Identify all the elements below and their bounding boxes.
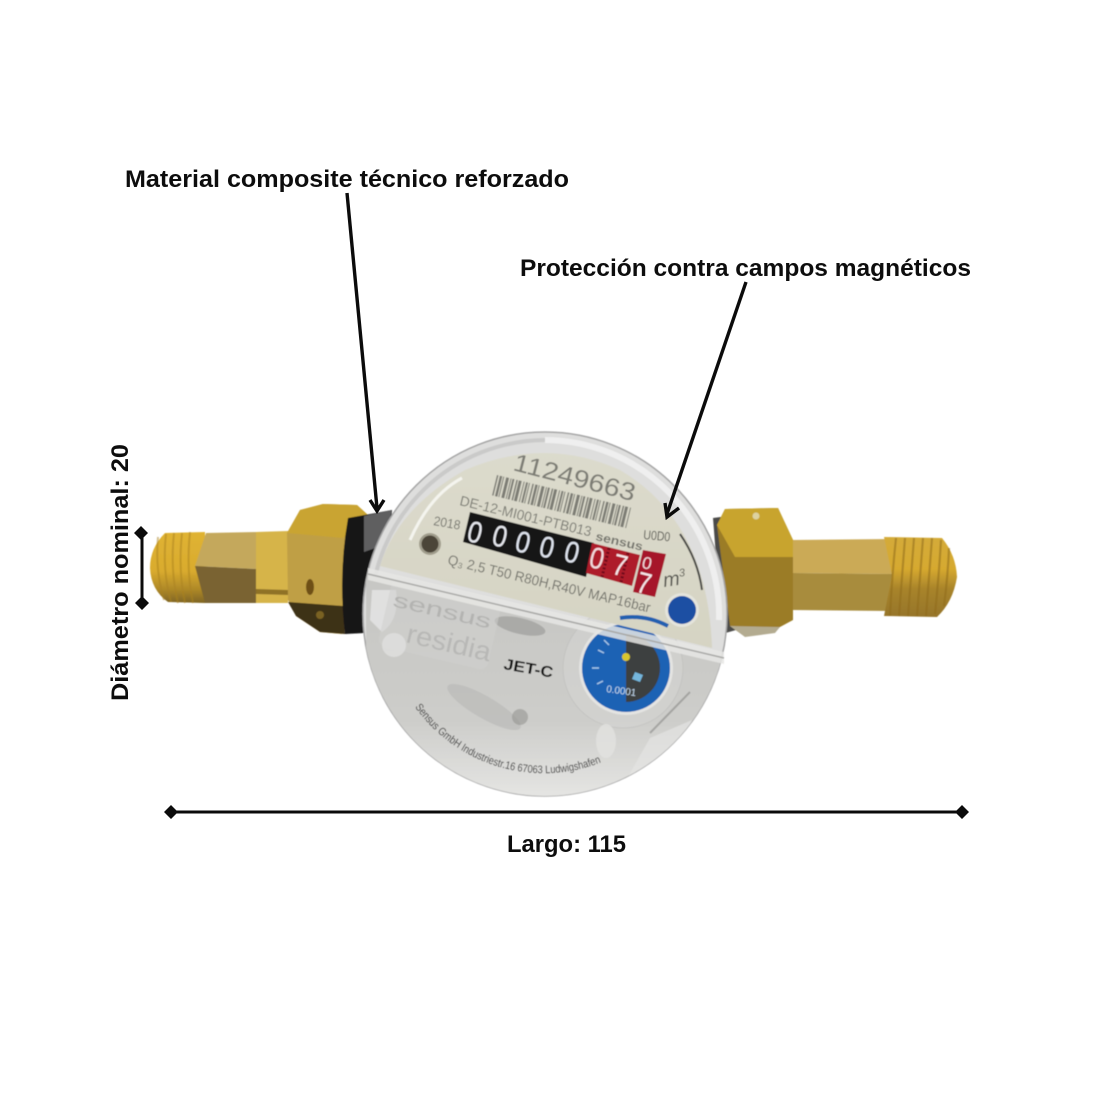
sensus residia logo plate — [377, 575, 503, 671]
odometer digits: 0 — [640, 553, 654, 574]
infographic: water meter diagram — [110, 170, 970, 857]
manufacturer address on rim: Sensus GmbH Industriestr.16 67063 Ludwigshafen — [415, 703, 601, 774]
unit: 3 — [678, 567, 687, 580]
odometer digits: 0 — [489, 518, 511, 554]
sensus residia logo plate: residia — [404, 619, 495, 667]
black meter collar — [342, 510, 392, 634]
sensus small logo: sensus — [594, 529, 645, 554]
code U0D0: U0D0 — [643, 527, 671, 544]
photo: water meter — [149, 430, 958, 798]
unit: m — [662, 568, 681, 592]
serial number: 11249663 — [510, 449, 639, 507]
arrow: to composite body — [347, 193, 384, 511]
certification code: DE-12-MI001-PTB013 — [458, 492, 593, 539]
title: composite material callout: Material composite técnico reforzado — [125, 166, 569, 193]
odometer digits: 0 — [561, 534, 583, 570]
clear lens ridge — [368, 568, 724, 664]
blue button — [665, 593, 699, 627]
small flow dial: 0.0001 — [606, 684, 637, 699]
dimension: nominal diameter — [134, 526, 149, 610]
odometer digits: 0 — [586, 540, 608, 576]
odometer digits: 7 — [633, 565, 655, 601]
odometer digits: 0 — [536, 529, 558, 565]
year: 2018 — [432, 513, 462, 533]
sealing hole — [419, 533, 441, 555]
barcode — [495, 485, 630, 518]
small flow dial — [563, 608, 683, 728]
upper printed dial face — [380, 453, 712, 648]
left brass fitting — [150, 504, 368, 634]
right brass fitting — [713, 508, 957, 637]
model label: JET-C — [502, 656, 554, 682]
label: length: Largo: 115 — [507, 831, 626, 858]
lower transparent dome — [366, 572, 726, 800]
arrow: to magnetic protection area — [665, 282, 746, 517]
odometer digits: 0 — [464, 514, 486, 550]
technical ratings: Q₃ 2,5 T50 R80H,R40V MAP16bar — [446, 551, 653, 616]
odometer digits — [463, 512, 666, 601]
meter body lens — [363, 432, 727, 796]
odometer digits: 0 — [512, 524, 534, 560]
label: nominal diameter: Diámetro nominal: 20 — [107, 444, 134, 701]
title: magnetic protection callout: Protección contra campos magnéticos — [520, 255, 971, 282]
dial cover tab — [596, 692, 690, 758]
sensus residia logo plate: sensus — [391, 589, 493, 633]
dimension: length — [164, 805, 969, 819]
odometer digits: 7 — [609, 547, 631, 583]
